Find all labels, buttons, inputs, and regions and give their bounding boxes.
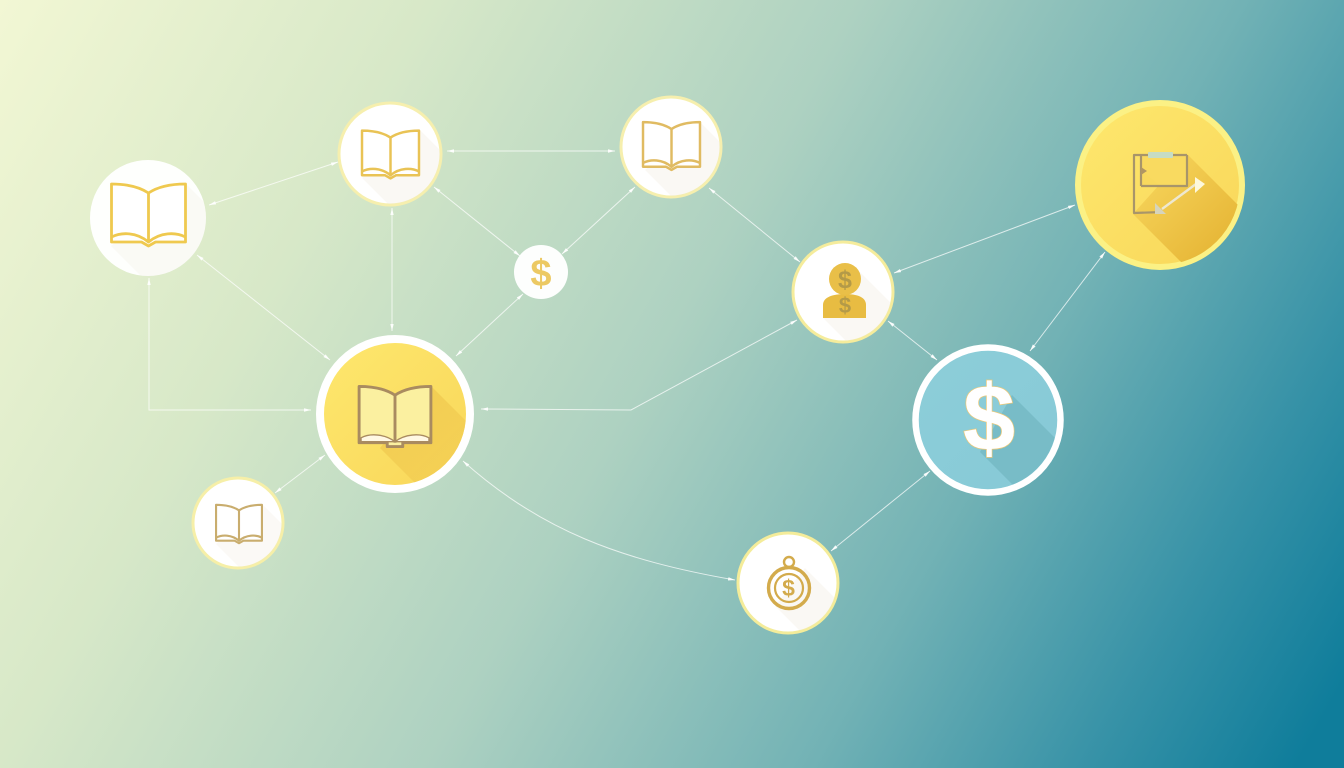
icon: clipboard and pen bbox=[1134, 152, 1205, 214]
node: clipboard, gold bbox=[1075, 100, 1245, 270]
node: open book, top centre-left bbox=[338, 102, 442, 206]
node: person with dollar bbox=[792, 240, 894, 344]
node: open book, small lower-left bbox=[192, 476, 284, 570]
icon: person bbox=[823, 263, 866, 318]
icon: person: $ bbox=[839, 293, 851, 318]
icon: book outline bbox=[643, 122, 700, 170]
node: open book, top centre-right bbox=[620, 96, 722, 198]
icon: coin with loop: $ bbox=[782, 575, 795, 601]
node: dollar, blue bbox=[912, 344, 1064, 496]
icon: person: $ bbox=[838, 266, 852, 294]
icon: book outline bbox=[216, 505, 262, 543]
icon: book outline bbox=[362, 131, 419, 178]
icon: coin with loop bbox=[768, 557, 810, 608]
node: open book, large white bbox=[90, 160, 206, 276]
node: small dollar bbox=[514, 245, 568, 299]
icon: dollar sign: $ bbox=[530, 253, 552, 295]
node: open book, main gold bbox=[316, 335, 474, 493]
icon: book, filled bbox=[359, 386, 431, 447]
icon: book outline bbox=[112, 184, 186, 246]
icon: dollar sign: $ bbox=[963, 365, 1015, 470]
connector arrows bbox=[149, 151, 1105, 580]
node: coin medal bbox=[736, 532, 840, 634]
